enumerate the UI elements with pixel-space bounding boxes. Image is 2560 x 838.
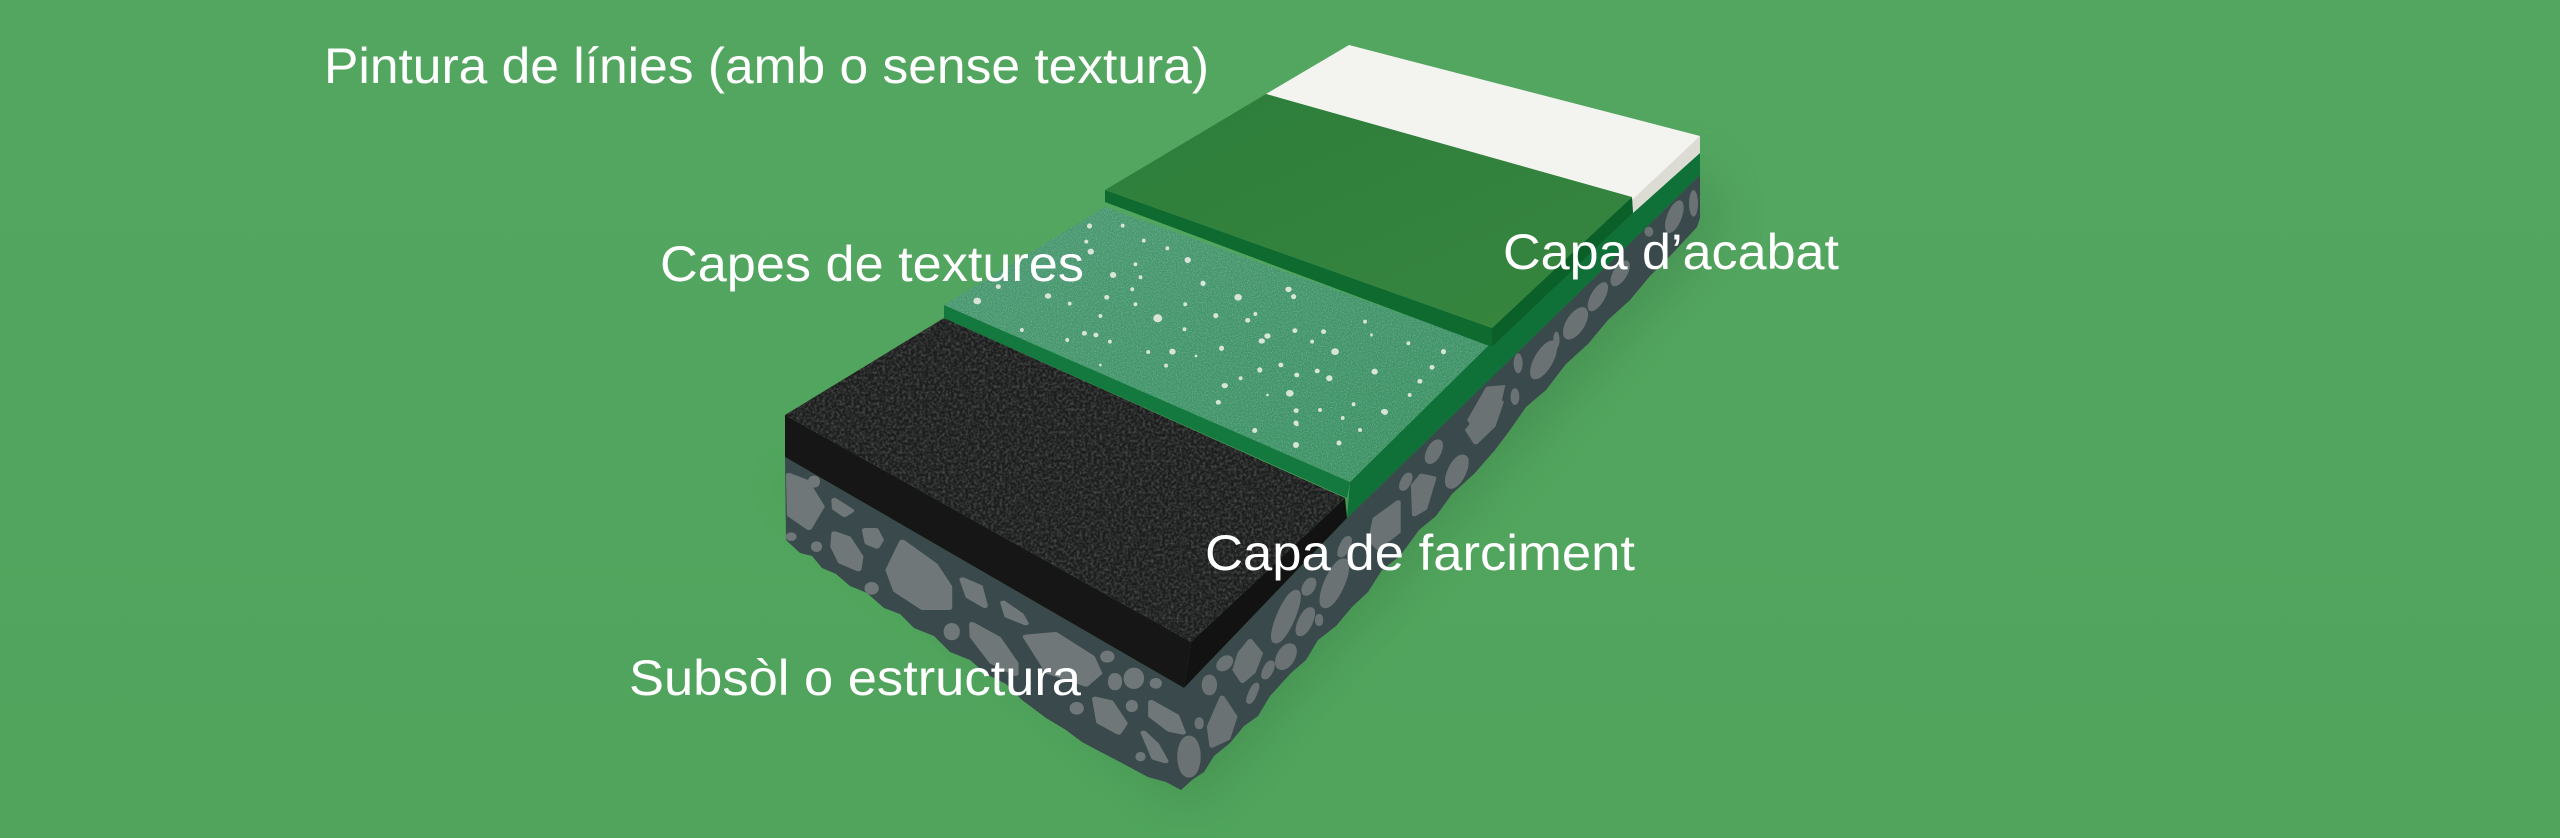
line paint right side	[1632, 136, 1700, 213]
fill layer left side	[785, 415, 1191, 688]
layer: fill layer (black)	[785, 318, 1347, 688]
finish coat right side	[1492, 197, 1633, 347]
left-face stones	[788, 475, 1183, 761]
texture layer front side	[944, 305, 1350, 498]
label: line paint: Pintura de línies (amb o sense textura)	[324, 38, 1209, 94]
fill layer top surface	[785, 318, 1345, 642]
subsoil base shape	[785, 175, 1700, 790]
line paint top surface	[1266, 45, 1700, 200]
lower texture speckles	[1253, 408, 1388, 448]
layer: line paint (white)	[1266, 45, 1700, 213]
label: texture coats: Capes de textures	[660, 236, 1084, 292]
shadow under the layered block	[770, 160, 1720, 805]
fill layer right side	[1184, 498, 1347, 688]
finish coat top surface	[1105, 94, 1632, 328]
texture layer top surface	[944, 207, 1489, 482]
layered flooring block	[785, 45, 1700, 790]
layer: subsoil or structure	[785, 175, 1700, 790]
upper right-face stones	[1467, 190, 1698, 440]
right-face stones	[1180, 402, 1501, 776]
label: subsoil or structure: Subsòl o estructura	[629, 650, 1081, 706]
label: fill layer: Capa de farciment	[1205, 525, 1635, 581]
texture speckles	[973, 223, 1446, 433]
layer: finish coat (dark green)	[1105, 94, 1633, 347]
finish coat front side	[1105, 190, 1492, 347]
layer: texture coats (teal)	[944, 207, 1489, 498]
layer: base green strip	[1347, 153, 1700, 518]
label: finish coat: Capa d’acabat	[1503, 224, 1839, 280]
